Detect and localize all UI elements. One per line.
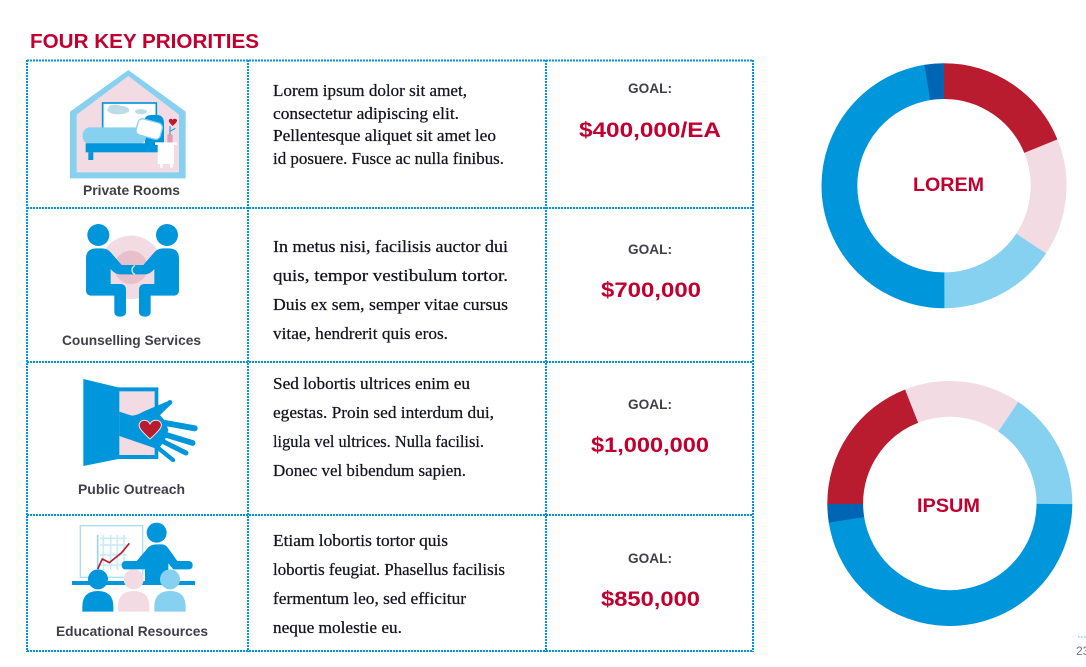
goal: private rooms: $400,000/EA bbox=[579, 119, 721, 142]
goal: private rooms bbox=[579, 81, 721, 142]
icon: teacher and students bbox=[72, 523, 195, 612]
text block: educational resources: Etiam lobortis tortor quis bbox=[273, 531, 448, 550]
text block: counselling services: quis, tempor vestibulum tortor. bbox=[273, 266, 508, 285]
donut chart: ipsum bbox=[805, 358, 1086, 649]
text block: public outreach bbox=[273, 374, 494, 480]
label: public outreach: Public Outreach bbox=[78, 481, 185, 497]
goal: educational resources: GOAL: bbox=[628, 551, 672, 566]
row: public outreach bbox=[78, 374, 709, 497]
text block: private rooms: Pellentesque aliquet sit amet leo bbox=[273, 126, 496, 145]
text block: public outreach: ligula vel ultrices. Nulla facilisi. bbox=[273, 432, 484, 451]
text block: public outreach: Sed lobortis ultrices enim eu bbox=[273, 374, 470, 393]
text block: public outreach: egestas. Proin sed interdum dui, bbox=[273, 403, 494, 422]
text block: educational resources bbox=[273, 531, 505, 637]
text block: private rooms: Lorem ipsum dolor sit amet, bbox=[273, 81, 467, 100]
label: private rooms: Private Rooms bbox=[83, 182, 180, 198]
text block: counselling services bbox=[273, 237, 508, 343]
text block: private rooms bbox=[273, 81, 504, 168]
text block: educational resources: neque molestie eu. bbox=[273, 618, 402, 637]
goal: public outreach: $1,000,000 bbox=[591, 434, 709, 457]
row: counselling services bbox=[62, 224, 701, 348]
donut chart: lorem bbox=[799, 41, 1086, 331]
icon: hand with heart bbox=[83, 379, 195, 466]
label: counselling services: Counselling Services bbox=[62, 332, 201, 348]
goal: educational resources: $850,000 bbox=[601, 588, 700, 611]
goal: educational resources bbox=[601, 551, 700, 611]
icon: house with bed bbox=[70, 70, 186, 178]
goal: public outreach bbox=[591, 397, 709, 457]
donut label: ipsum: IPSUM bbox=[917, 495, 980, 517]
page number bbox=[1076, 637, 1086, 658]
donut label: lorem: LOREM bbox=[913, 174, 984, 196]
text block: educational resources: lobortis feugiat. Phasellus facilisis bbox=[273, 560, 505, 579]
text block: counselling services: vitae, hendrerit quis eros. bbox=[273, 324, 448, 343]
text block: private rooms: id posuere. Fusce ac nulla finibus. bbox=[273, 149, 504, 168]
text block: public outreach: Donec vel bibendum sapien. bbox=[273, 461, 466, 480]
row: private rooms bbox=[70, 70, 721, 198]
text block: counselling services: Duis ex sem, semper vitae cursus bbox=[273, 295, 508, 314]
text block: counselling services: In metus nisi, facilisis auctor dui bbox=[273, 237, 508, 256]
goal: counselling services: $700,000 bbox=[601, 279, 701, 302]
icon: counselling bbox=[86, 224, 179, 317]
text block: private rooms: consectetur adipiscing elit. bbox=[273, 104, 459, 123]
text block: educational resources: fermentum leo, sed efficitur bbox=[273, 589, 466, 608]
goal: counselling services bbox=[601, 242, 701, 302]
row: educational resources bbox=[56, 523, 700, 639]
goal: private rooms: GOAL: bbox=[628, 81, 672, 96]
label: educational resources: Educational Resources bbox=[56, 623, 208, 639]
goal: public outreach: GOAL: bbox=[628, 397, 672, 412]
title: FOUR KEY PRIORITIES bbox=[30, 30, 259, 53]
goal: counselling services: GOAL: bbox=[628, 242, 672, 257]
